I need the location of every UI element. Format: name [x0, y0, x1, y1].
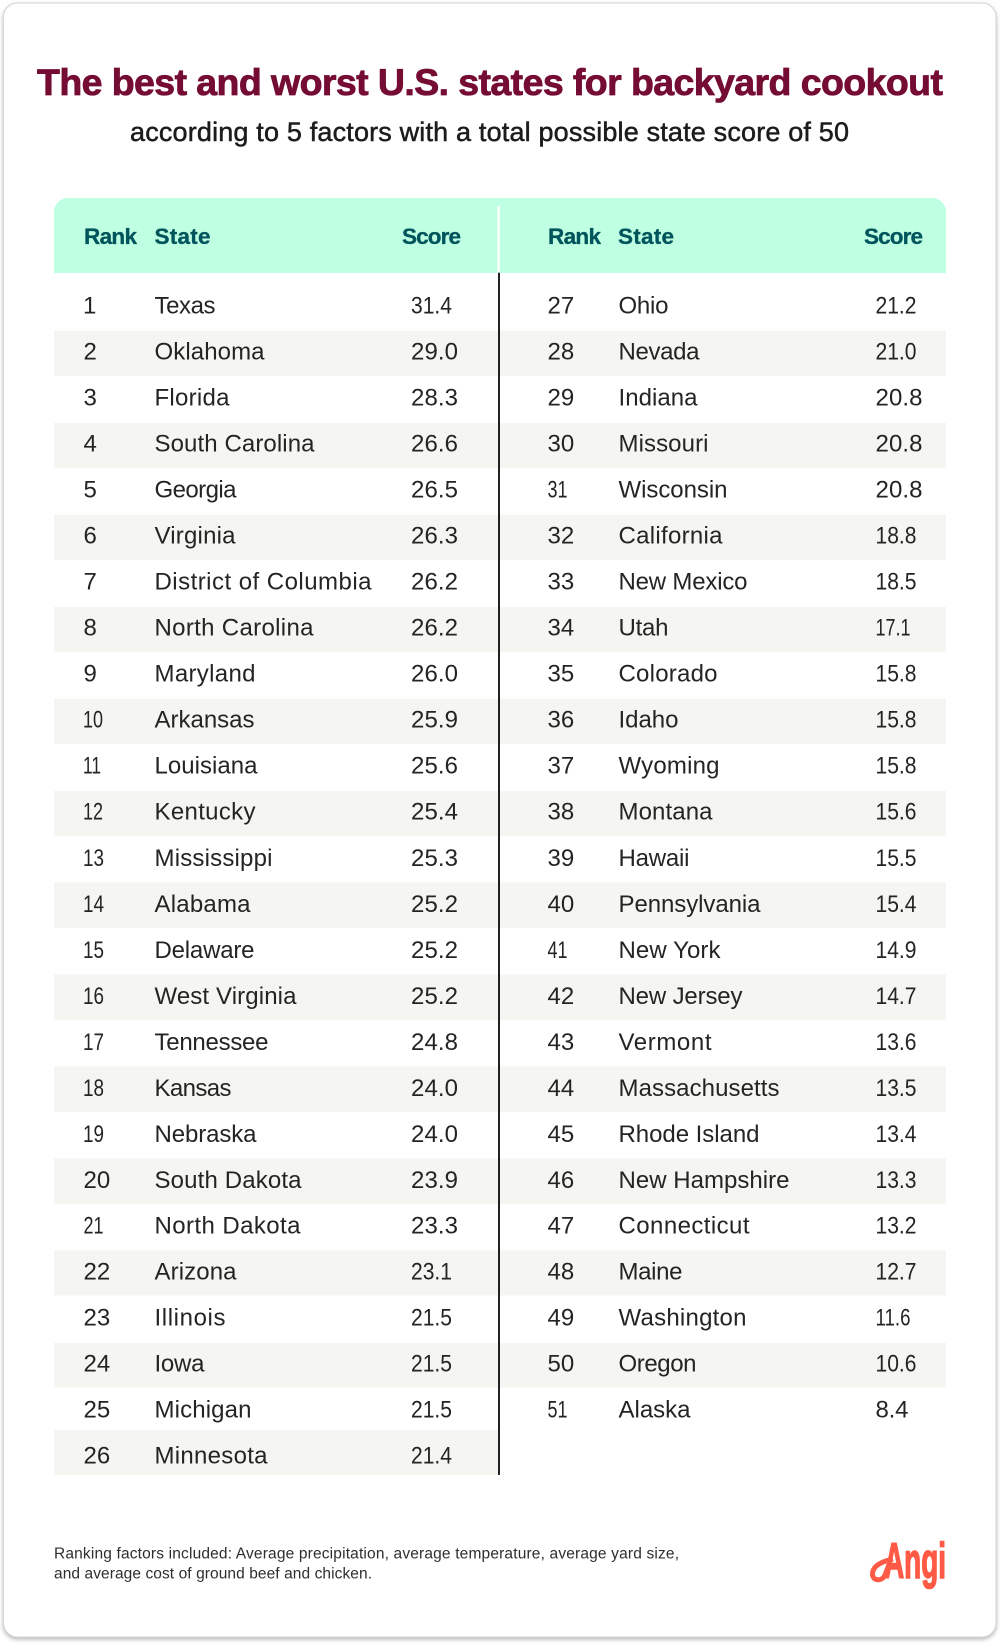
row 13: 13: [83, 845, 104, 872]
row 39: Hawaii: [618, 845, 690, 872]
row 10: 25.9: [411, 706, 458, 733]
row 33: 33: [548, 568, 574, 595]
left column rows: [83, 292, 458, 1469]
row 29: [548, 384, 922, 411]
row 2: 29.0: [411, 338, 458, 365]
row 1: [83, 292, 452, 319]
footnote: [54, 1546, 679, 1583]
row 30: Missouri: [618, 430, 708, 457]
row 33: 18.5: [876, 568, 916, 595]
row 32: 18.8: [876, 522, 916, 549]
row 16: 16: [83, 983, 104, 1010]
row 12: Kentucky: [154, 798, 256, 825]
row 12: 25.4: [411, 798, 458, 825]
row 27: [548, 292, 916, 319]
row 42: 14.7: [876, 983, 916, 1010]
row 29: Indiana: [618, 384, 698, 411]
row 34: [548, 614, 910, 641]
row 48: 48: [548, 1258, 574, 1285]
row 7: 7: [84, 568, 97, 595]
title: The best and worst U.S. states for backyard cookout: [37, 61, 944, 103]
row 13: [83, 845, 458, 872]
row 18: 24.0: [411, 1075, 458, 1102]
row 40: Pennsylvania: [618, 891, 761, 918]
row 50: [548, 1350, 916, 1377]
row 29: 20.8: [876, 384, 922, 411]
row 28: 21.0: [876, 338, 916, 365]
row 36: Idaho: [618, 706, 678, 733]
row 51: [548, 1396, 908, 1423]
row 9: [84, 660, 458, 687]
table header: Score: [402, 224, 461, 249]
row 17: [83, 1029, 458, 1056]
row 50: Oregon: [618, 1350, 696, 1377]
row 47: 13.2: [876, 1212, 916, 1239]
row 22: Arizona: [154, 1258, 237, 1285]
row 45: 13.4: [876, 1121, 916, 1148]
row 38: [548, 798, 916, 825]
row 50: 50: [548, 1350, 574, 1377]
row 7: 26.2: [411, 568, 458, 595]
row 23: 21.5: [411, 1304, 452, 1331]
row 44: 44: [548, 1075, 574, 1102]
row 13: 25.3: [411, 845, 458, 872]
row 18: Kansas: [154, 1075, 232, 1102]
row 47: 47: [548, 1212, 574, 1239]
row 19: 19: [83, 1121, 104, 1148]
row 19: 24.0: [411, 1121, 458, 1148]
row 2: 2: [84, 338, 97, 365]
row 45: [548, 1121, 916, 1148]
row 43: 13.6: [876, 1029, 916, 1056]
row 8: North Carolina: [154, 614, 314, 641]
row 9: Maryland: [154, 660, 256, 687]
row 31: Wisconsin: [618, 476, 728, 503]
row 44: 13.5: [876, 1075, 916, 1102]
row 47: Connecticut: [618, 1212, 750, 1239]
row 46: [548, 1167, 916, 1194]
row 24: Iowa: [154, 1350, 205, 1377]
row 17: Tennessee: [154, 1029, 268, 1056]
row 20: [84, 1167, 458, 1194]
row 7: [84, 568, 458, 595]
table: [54, 198, 946, 1475]
row 33: [548, 568, 916, 595]
row 24: 24: [84, 1350, 110, 1377]
row 24: 21.5: [411, 1350, 452, 1377]
row 3: Florida: [154, 384, 230, 411]
row 22: [84, 1258, 452, 1285]
row 28: 28: [548, 338, 574, 365]
row 35: 15.8: [876, 660, 916, 687]
row 9: 26.0: [411, 660, 458, 687]
row 35: Colorado: [618, 660, 718, 687]
row 4: 4: [84, 430, 97, 457]
row 46: New Hampshire: [618, 1167, 790, 1194]
row 30: 20.8: [876, 430, 922, 457]
logo: Angi: Angi: [884, 1533, 946, 1589]
row 6: 26.3: [411, 522, 458, 549]
row 28: Nevada: [618, 338, 700, 365]
row 41: 41: [548, 937, 568, 964]
row 18: [83, 1075, 458, 1102]
row 14: 25.2: [411, 891, 458, 918]
row 6: 6: [84, 522, 97, 549]
row 37: Wyoming: [618, 752, 720, 779]
row 30: [548, 430, 922, 457]
row 32: 32: [548, 522, 574, 549]
row 4: 26.6: [411, 430, 458, 457]
row 44: Massachusetts: [618, 1075, 780, 1102]
row 11: Louisiana: [154, 752, 258, 779]
row 8: 8: [84, 614, 97, 641]
row 35: 35: [548, 660, 574, 687]
row 43: [548, 1029, 916, 1056]
row 17: 17: [83, 1029, 104, 1056]
row 8: 26.2: [411, 614, 458, 641]
row 51: 8.4: [876, 1396, 908, 1423]
row 22: 23.1: [411, 1258, 452, 1285]
row 34: 34: [548, 614, 574, 641]
row 27: 27: [548, 292, 574, 319]
row 48: Maine: [618, 1258, 682, 1285]
row 36: 15.8: [876, 706, 916, 733]
row 30: 30: [548, 430, 574, 457]
row 51: 51: [548, 1396, 568, 1423]
row 10: Arkansas: [154, 706, 254, 733]
row 19: Nebraska: [154, 1121, 257, 1148]
right column rows: [548, 292, 922, 1423]
row 12: 12: [83, 798, 103, 825]
row 26: [84, 1442, 452, 1469]
table header: Rank: [548, 224, 601, 249]
row 2: [84, 338, 458, 365]
row 36: 36: [548, 706, 574, 733]
row 6: [84, 522, 458, 549]
row 31: [548, 476, 922, 503]
row 4: [84, 430, 458, 457]
row 15: Delaware: [154, 937, 254, 964]
row 11: [83, 752, 458, 779]
row 41: [548, 937, 916, 964]
row 26: 21.4: [411, 1442, 452, 1469]
row 18: 18: [83, 1075, 104, 1102]
row 48: 12.7: [876, 1258, 916, 1285]
row 20: 20: [84, 1167, 110, 1194]
row 32: [548, 522, 916, 549]
row 10: [83, 706, 458, 733]
row 3: 3: [84, 384, 97, 411]
row 31: 31: [548, 476, 568, 503]
table header: State: [154, 224, 210, 249]
row 47: [548, 1212, 916, 1239]
row 34: 17.1: [876, 614, 910, 641]
row 5: 26.5: [411, 476, 458, 503]
row 7: District of Columbia: [154, 568, 372, 595]
row 14: 14: [83, 891, 104, 918]
row 25: 21.5: [411, 1396, 452, 1423]
row 37: 37: [548, 752, 574, 779]
row 21: 21: [84, 1212, 104, 1239]
footnote: and average cost of ground beef and chicken.: [54, 1566, 372, 1583]
row 35: [548, 660, 916, 687]
row 25: [84, 1396, 452, 1423]
row 42: [548, 983, 916, 1010]
table header: Score: [864, 224, 923, 249]
row 21: North Dakota: [154, 1212, 301, 1239]
row 49: Washington: [618, 1304, 746, 1331]
table header: Rank: [84, 224, 137, 249]
row 43: Vermont: [618, 1029, 712, 1056]
row 37: [548, 752, 916, 779]
row 15: 25.2: [411, 937, 458, 964]
row 23: [84, 1304, 452, 1331]
row 25: Michigan: [154, 1396, 252, 1423]
row 38: Montana: [618, 798, 713, 825]
row 23: 23: [84, 1304, 110, 1331]
row 16: 25.2: [411, 983, 458, 1010]
row 21: [84, 1212, 458, 1239]
row 5: [84, 476, 458, 503]
row 15: 15: [83, 937, 104, 964]
row 2: Oklahoma: [154, 338, 265, 365]
row 1: Texas: [154, 292, 216, 319]
row 4: South Carolina: [154, 430, 315, 457]
row 20: 23.9: [411, 1167, 458, 1194]
row 14: Alabama: [154, 891, 251, 918]
row 51: Alaska: [618, 1396, 691, 1423]
row 37: 15.8: [876, 752, 916, 779]
row 46: 46: [548, 1167, 574, 1194]
row 39: 15.5: [876, 845, 916, 872]
row 27: Ohio: [618, 292, 668, 319]
row 20: South Dakota: [154, 1167, 302, 1194]
row 16: West Virginia: [154, 983, 297, 1010]
row 32: California: [618, 522, 723, 549]
row 15: [83, 937, 458, 964]
row 40: 40: [548, 891, 574, 918]
row 28: [548, 338, 916, 365]
row 44: [548, 1075, 916, 1102]
row 50: 10.6: [876, 1350, 916, 1377]
row 29: 29: [548, 384, 574, 411]
row 33: New Mexico: [618, 568, 748, 595]
row 5: 5: [84, 476, 97, 503]
row 22: 22: [84, 1258, 110, 1285]
row shading bands: [54, 331, 946, 1475]
row 42: New Jersey: [618, 983, 742, 1010]
row 17: 24.8: [411, 1029, 458, 1056]
row 1: 1: [83, 292, 96, 319]
row 23: Illinois: [154, 1304, 226, 1331]
row 38: 38: [548, 798, 574, 825]
logo: Angi: [872, 1533, 946, 1589]
table header: State: [618, 224, 674, 249]
row 40: 15.4: [876, 891, 916, 918]
row 38: 15.6: [876, 798, 916, 825]
table header: [54, 198, 946, 273]
row 21: 23.3: [411, 1212, 458, 1239]
row 8: [84, 614, 458, 641]
row 13: Mississippi: [154, 845, 272, 872]
row 27: 21.2: [876, 292, 916, 319]
row 9: 9: [84, 660, 97, 687]
subtitle: according to 5 factors with a total possible state score of 50: [130, 117, 849, 147]
row 31: 20.8: [876, 476, 922, 503]
row 19: [83, 1121, 458, 1148]
row 40: [548, 891, 916, 918]
row 3: 28.3: [411, 384, 458, 411]
row 49: 49: [548, 1304, 574, 1331]
row 42: 42: [548, 983, 574, 1010]
row 49: 11.6: [876, 1304, 910, 1331]
row 10: 10: [83, 706, 103, 733]
row 5: Georgia: [154, 476, 237, 503]
row 41: 14.9: [876, 937, 916, 964]
row 39: [548, 845, 916, 872]
row 48: [548, 1258, 916, 1285]
row 11: 11: [83, 752, 101, 779]
row 26: Minnesota: [154, 1442, 268, 1469]
row 3: [84, 384, 458, 411]
row 26: 26: [84, 1442, 110, 1469]
row 43: 43: [548, 1029, 574, 1056]
row 24: [84, 1350, 452, 1377]
row 45: 45: [548, 1121, 574, 1148]
row 11: 25.6: [411, 752, 458, 779]
row 45: Rhode Island: [618, 1121, 760, 1148]
row 46: 13.3: [876, 1167, 916, 1194]
row 12: [83, 798, 458, 825]
row 39: 39: [548, 845, 574, 872]
row 1: 31.4: [411, 292, 452, 319]
row 14: [83, 891, 458, 918]
row 36: [548, 706, 916, 733]
row 16: [83, 983, 458, 1010]
footnote: Ranking factors included: Average precipitation, average temperature, average yard size,: [54, 1546, 679, 1563]
row 49: [548, 1304, 910, 1331]
row 6: Virginia: [154, 522, 236, 549]
row 34: Utah: [618, 614, 668, 641]
row 25: 25: [84, 1396, 110, 1423]
row 41: New York: [618, 937, 722, 964]
column divider: [498, 273, 500, 1475]
